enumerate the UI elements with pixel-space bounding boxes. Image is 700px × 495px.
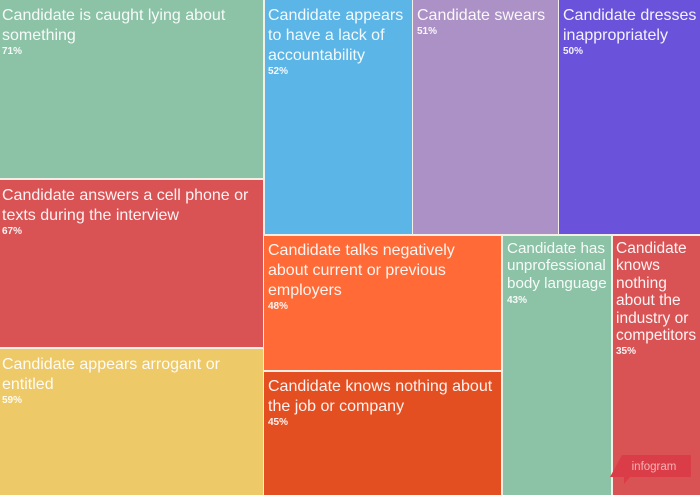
panel: talks negatively 48%: 48%	[268, 301, 288, 312]
panel: talks negatively 48%: employers	[268, 282, 342, 299]
panel: knows nothing about industry 35%: about the	[616, 292, 681, 309]
panel: talks negatively 48%: Candidate talks negatively	[268, 242, 455, 259]
panel: cell phone 67%: Candidate answers a cell phone or	[2, 187, 248, 204]
panel: knows nothing about job 45%: 45%	[268, 417, 288, 428]
panel: accountability 52%: Candidate appears	[268, 7, 403, 24]
panel: arrogant 59%: Candidate appears arrogant or	[2, 356, 220, 373]
panel: accountability 52%: 52%	[268, 66, 288, 77]
logo: infogram badge: infogram	[632, 461, 676, 473]
panel: body language 43%: unprofessional	[507, 257, 606, 274]
panel: knows nothing about industry 35%: Candidate	[616, 240, 687, 257]
panel: knows nothing about industry 35%: 35%	[616, 346, 636, 357]
panel: dresses inappropriately 50%: 50%	[563, 46, 583, 57]
panel: knows nothing about industry 35%: industry or	[616, 310, 688, 327]
panel: swears 51%: Candidate swears	[417, 7, 545, 24]
panel: cell phone 67%: texts during the interview	[2, 207, 179, 224]
panel: cell phone 67%: 67%	[2, 226, 22, 237]
panel: accountability 52%	[265, 0, 412, 234]
panel: caught lying 71%: something	[2, 27, 76, 44]
logo: infogram badge	[610, 455, 691, 484]
panel: swears 51%: 51%	[417, 26, 437, 37]
panel: body language 43%	[503, 236, 611, 495]
panel: swears 51%	[413, 0, 558, 234]
panel: dresses inappropriately 50%: Candidate dresses	[563, 7, 696, 24]
panel: knows nothing about job 45%: the job or company	[268, 398, 404, 415]
panel: knows nothing about industry 35%: competitors	[616, 327, 696, 344]
panel: knows nothing about industry 35%	[613, 236, 700, 495]
panel: talks negatively 48%: about current or previous	[268, 262, 446, 279]
panel: caught lying 71%: Candidate is caught lying about	[2, 7, 225, 24]
panel: knows nothing about job 45%	[264, 372, 501, 495]
panel: arrogant 59%: entitled	[2, 376, 54, 393]
panel: knows nothing about job 45%: Candidate knows nothing about	[268, 378, 492, 395]
panel: caught lying 71%: 71%	[2, 46, 22, 57]
panel: knows nothing about industry 35%: nothing	[616, 275, 667, 292]
panel: body language 43%: Candidate has	[507, 240, 605, 257]
panel: body language 43%: 43%	[507, 295, 527, 306]
panel: dresses inappropriately 50%: inappropriately	[563, 27, 668, 44]
panel: accountability 52%: to have a lack of	[268, 27, 385, 44]
panel: knows nothing about industry 35%: knows	[616, 257, 660, 274]
panel: caught lying 71%	[0, 0, 263, 178]
panel: dresses inappropriately 50%	[559, 0, 700, 234]
panel: talks negatively 48%	[264, 236, 501, 370]
panel: cell phone 67%	[0, 180, 263, 347]
panel: arrogant 59%: 59%	[2, 395, 22, 406]
panel: body language 43%: body language	[507, 275, 607, 292]
panel: arrogant 59%	[0, 349, 263, 495]
panel: accountability 52%: accountability	[268, 47, 365, 64]
